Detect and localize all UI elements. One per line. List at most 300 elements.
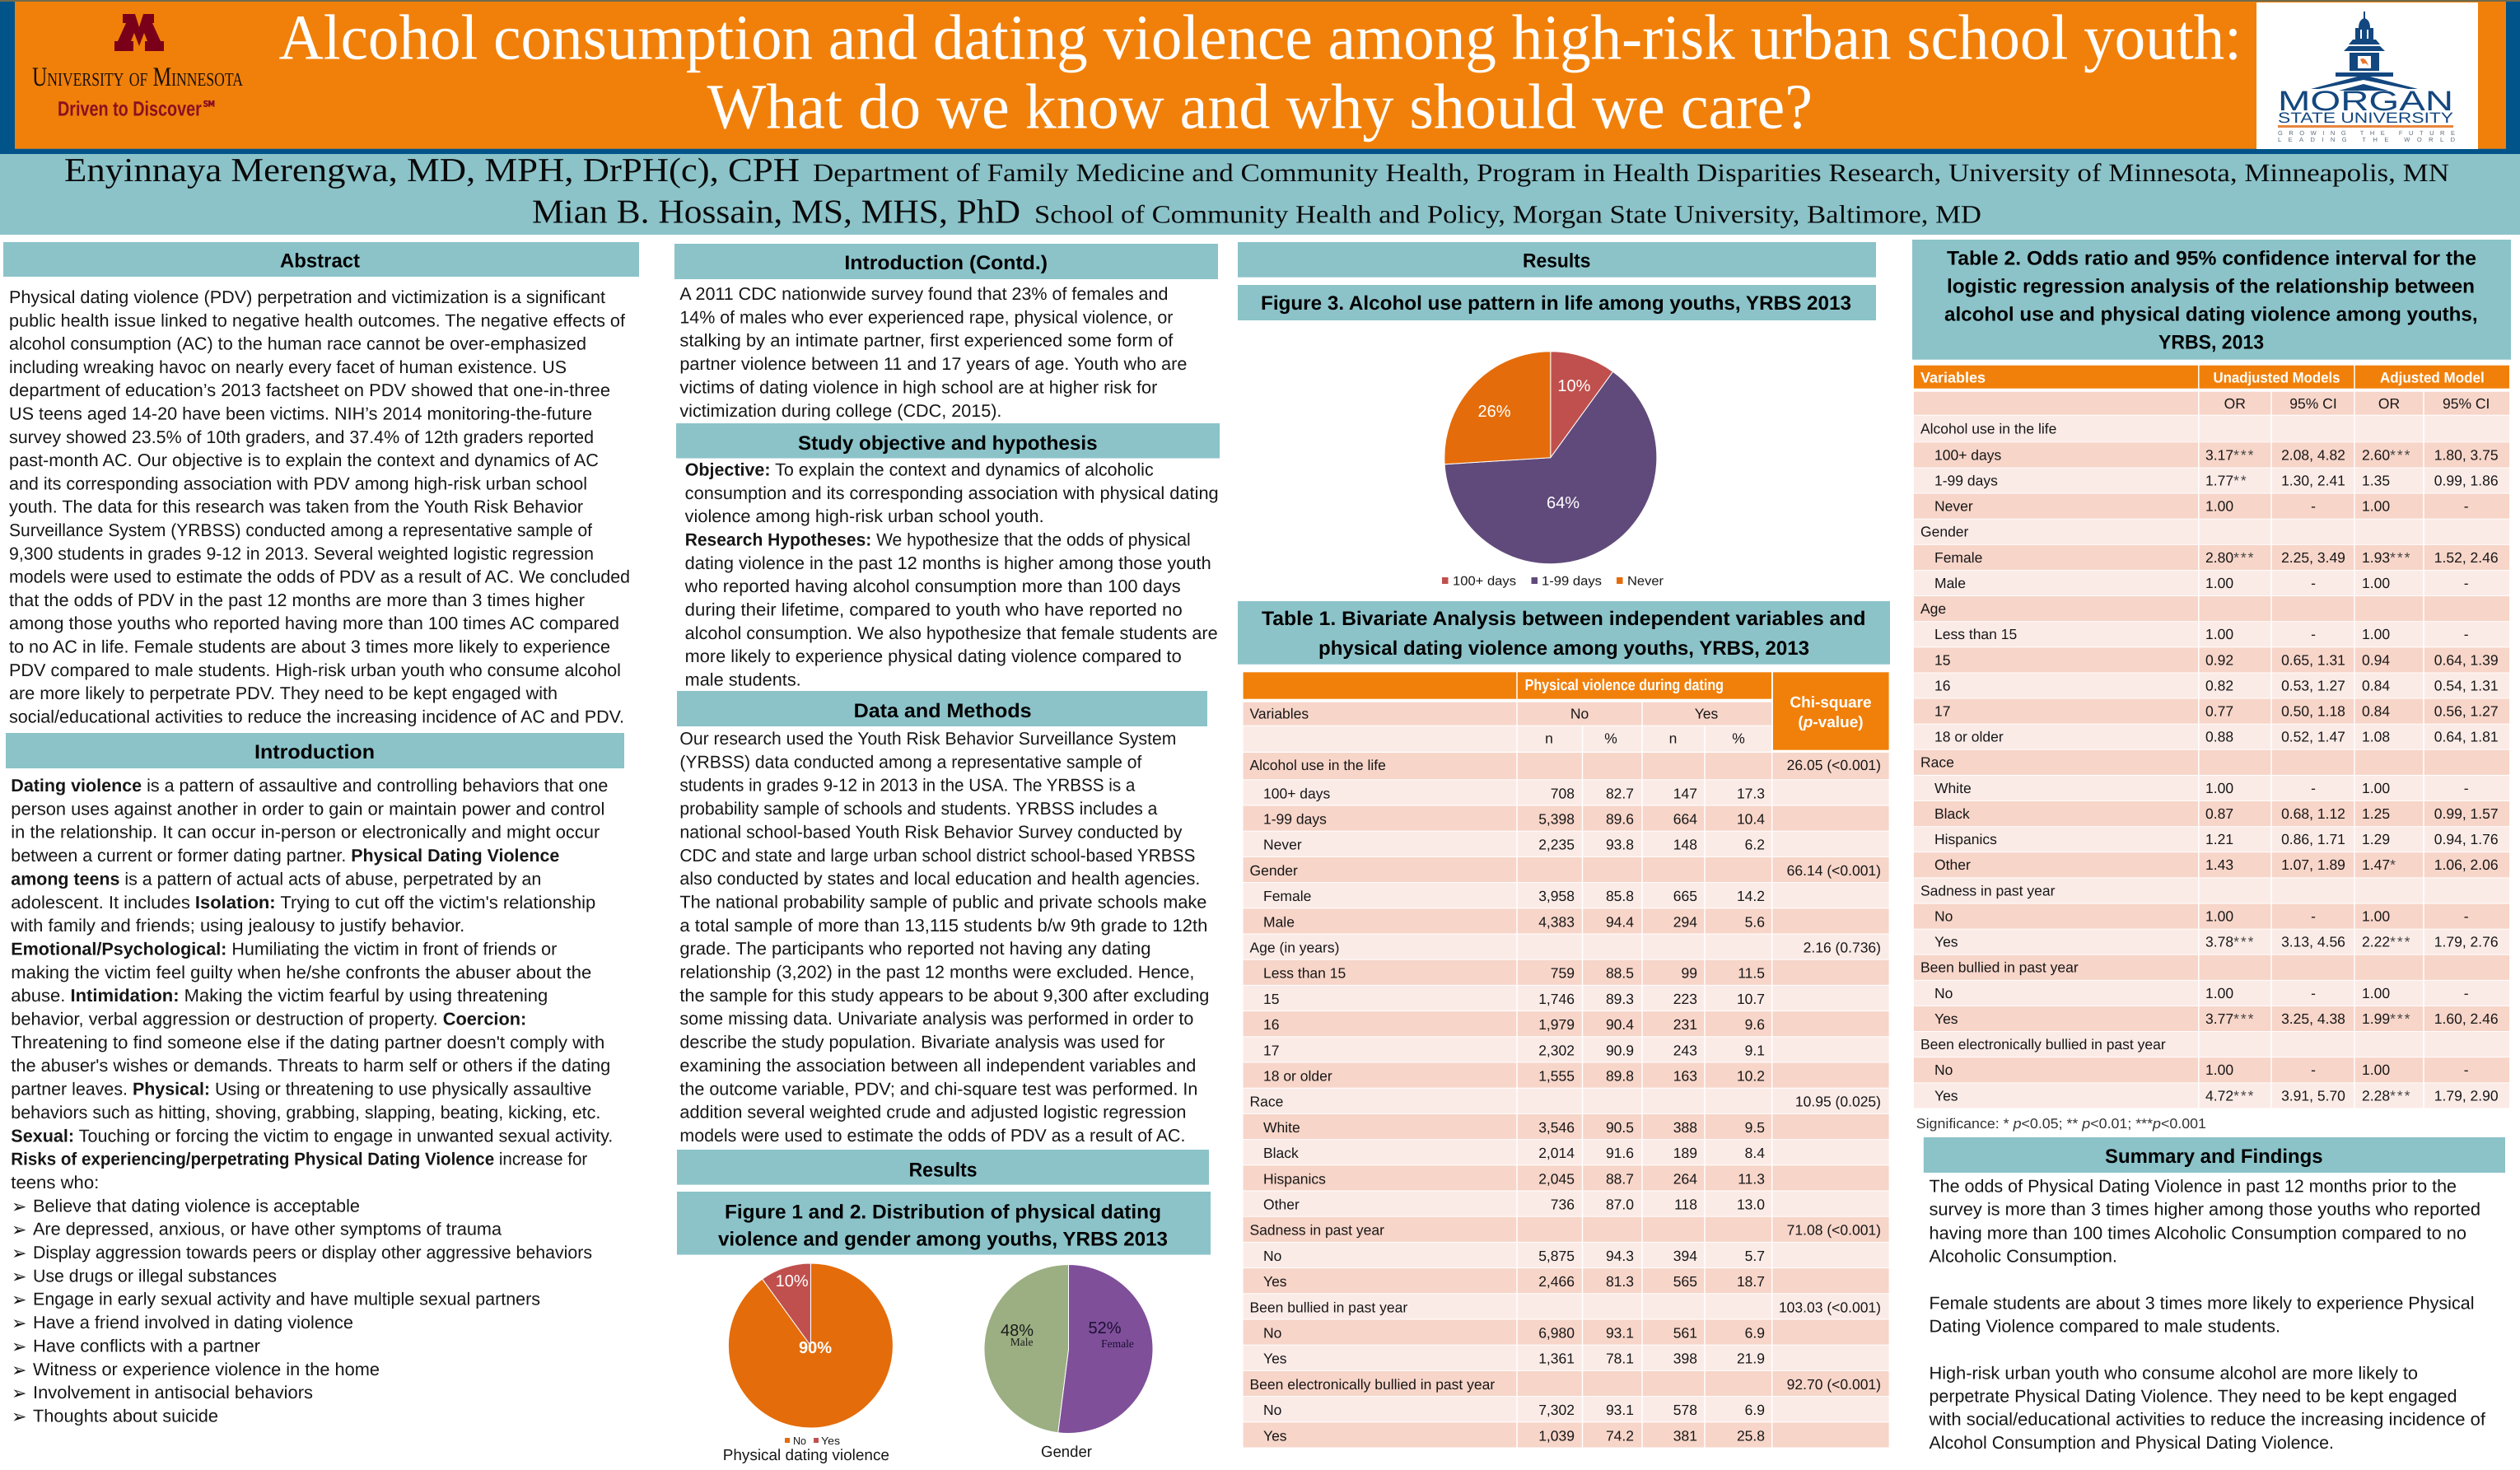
table rows: race: 10.95 (0.025) [1795, 1094, 1881, 1110]
table rows: alcohol use: 100+ days [1263, 785, 1330, 801]
table rows: race: 8.4 [1745, 1145, 1765, 1161]
table rows: alcohol use: 10.4 [1737, 810, 1765, 827]
pie chart: alcohol use pattern: 64% [1547, 494, 1580, 512]
legend: alcohol use: 1-99 days [1542, 575, 1602, 589]
band: authors and affiliations: Mian B. Hossain, MS, MHS, PhD [532, 193, 1020, 231]
text block: CDC survey [679, 284, 1187, 421]
table rows: age: 0.94 [2362, 651, 2390, 668]
table rows: age: Less than 15 [1263, 965, 1346, 982]
heading: table 1: physical dating violence among youths, YRBS, 2013 [1318, 637, 1809, 660]
text block: objective and hypotheses: dating violence in the past 12 months is higher among those youth [685, 553, 1211, 573]
table rows: race: Hispanics [1263, 1170, 1326, 1187]
table rows: alcohol use: 1.00 [2205, 497, 2233, 514]
table rows: sadness: 2,466 [1538, 1273, 1575, 1290]
table rows: race: 91.6 [1606, 1145, 1634, 1161]
table rows: age: 90.4 [1606, 1016, 1634, 1033]
panel: summary and findings [1924, 1137, 2505, 1453]
text block: summary finding on alcohol: having more than 100 times Alcoholic Consumption compared to no [1929, 1223, 2466, 1243]
table rows: sadness: 1.00 [2362, 908, 2390, 924]
table rows: sadness: No [1934, 908, 1953, 924]
list: risk factors [12, 1196, 592, 1428]
text block: objective and hypotheses: consumption and its corresponding association with physical dating [685, 483, 1219, 503]
text block: abstract body: US teens aged 14-20 have been victims. NIH’s 2014 monitoring-the-future [9, 404, 592, 423]
pie chart: alcohol use pattern: 26% [1477, 403, 1511, 421]
text block: summary recommendation: with social/educational activities to reduce the increasing incidence of [1928, 1410, 2485, 1430]
banner: title header [0, 0, 2520, 154]
caption: physical dating violence: Physical dating violence [723, 1447, 889, 1464]
heading: study objective [676, 423, 1220, 458]
pie chart: gender: 52% [1088, 1319, 1122, 1337]
table rows: sadness: 94.3 [1606, 1248, 1634, 1264]
text block: CDC survey: A 2011 CDC nationwide survey found that 23% of females and [679, 284, 1168, 304]
list: risk factors: Display aggression towards peers or display other aggressive behaviors [33, 1243, 592, 1262]
table rows: bullied: 21.9 [1737, 1351, 1765, 1367]
text block: summary finding on alcohol: survey is more than 3 times higher among those youths who reported [1929, 1200, 2480, 1220]
table rows: gender: 3,958 [1538, 888, 1575, 904]
logo: University of Minnesota [32, 14, 243, 120]
table rows: alcohol use: 0.99, 1.86 [2434, 472, 2499, 488]
table rows: bullied: 103.03 (<0.001) [1779, 1299, 1881, 1315]
list: risk factors: ➢ [12, 1314, 26, 1334]
table rows: bullied: 1.60, 2.46 [2434, 1010, 2499, 1027]
heading: results: Results [909, 1160, 978, 1182]
text block: methods: relationship (3,202) in the past 12 months were excluded. Hence, [679, 962, 1194, 982]
text block: abstract body: Surveillance System (YRBSS) conducted among a representative sample of [9, 520, 592, 540]
text block: introduction definitions: behavior, verbal aggression or destruction of property. Coercion: [11, 1010, 526, 1029]
table rows: electronically bullied: 6.9 [1745, 1402, 1765, 1418]
table rows: age: 163 [1673, 1067, 1697, 1084]
text block: abstract body: alcohol consumption (AC) to the human race cannot be over-emphasized [9, 334, 586, 354]
table rows: sadness: Yes [1263, 1273, 1287, 1290]
text block: abstract body: that the odds of PDV in the past 12 months are more than 3 times higher [9, 590, 585, 610]
pie chart: physical dating violence: 10% [776, 1272, 809, 1290]
text block: abstract body [9, 287, 630, 726]
table rows: gender: 1.93*** [2362, 549, 2411, 566]
table rows: sadness: 1.00 [2205, 908, 2233, 924]
table rows: age: 9.6 [1745, 1016, 1765, 1033]
heading: figure 3: Figure 3. Alcohol use pattern in life among youths, YRBS 2013 [1261, 292, 1851, 315]
table rows: electronically bullied: - [2464, 1062, 2469, 1078]
table rows: gender: 2.80*** [2205, 549, 2255, 566]
table rows: race: - [2311, 780, 2316, 796]
text block: CDC survey: 14% of males who ever experienced rape, physical violence, or [679, 307, 1173, 327]
table rows: electronically bullied: 1.79, 2.90 [2434, 1087, 2499, 1104]
table rows: alcohol use: Alcohol use in the life [1250, 757, 1386, 773]
text: tagline: Driven to Discover℠ [58, 97, 218, 120]
panel: introduction [6, 733, 624, 1428]
table rows: age: 90.9 [1606, 1042, 1634, 1058]
pie chart: gender: Female [1101, 1337, 1134, 1350]
text block: methods: the sample for this study appears to be about 9,300 after excluding [679, 986, 1209, 1006]
heading: table 2: alcohol use and physical dating violence among youths, [1944, 303, 2478, 325]
table rows: age: 1.00 [2205, 626, 2233, 642]
table rows: bullied [1914, 955, 2509, 1031]
table rows: age: 1.00 [2362, 626, 2390, 642]
text block: abstract body: models were used to estimate the odds of PDV as a result of AC. We concluded [9, 567, 630, 587]
text block: CDC survey: victims of dating violence in high school are at higher risk for [679, 377, 1157, 397]
table rows: age: 2,302 [1538, 1042, 1575, 1058]
table rows: bullied: 1.99*** [2362, 1010, 2411, 1027]
table rows: age: 18 or older [1934, 729, 2004, 745]
table rows: gender: Female [1934, 549, 1982, 566]
table rows: race: 9.5 [1745, 1119, 1765, 1136]
text block: introduction definitions: person uses against another in order to gain or maintain power and control [11, 799, 604, 819]
table rows: gender [1914, 520, 2509, 595]
table rows: age: 0.84 [2362, 703, 2390, 720]
table rows: race: 1.47* [2362, 856, 2397, 873]
text block: abstract body: public health issue linked to negative health outcomes. The negative effects of [9, 310, 625, 330]
table: logistic regression [1914, 365, 2509, 1108]
text: motto: GROWING THE FUTURE [2278, 129, 2455, 137]
table rows: gender [1244, 857, 1889, 934]
table rows: electronically bullied: 3.91, 5.70 [2281, 1087, 2345, 1104]
table rows: race: 87.0 [1606, 1196, 1634, 1212]
text block: introduction definitions: teens who: [11, 1173, 99, 1192]
table rows: alcohol use: 1.77** [2205, 472, 2248, 488]
heading: results [677, 1150, 1209, 1185]
heading: summary and findings [1924, 1137, 2505, 1173]
table rows: age: 99 [1682, 965, 1697, 982]
text block: summary finding on alcohol: The odds of Physical Dating Violence in past 12 months prior to the [1929, 1177, 2457, 1197]
table rows: race: 264 [1673, 1170, 1697, 1187]
table rows: race: White [1934, 780, 1972, 796]
table rows: alcohol use: 100+ days [1934, 446, 2001, 463]
text block: objective and hypotheses: alcohol consumption. We also hypothesize that female students are [685, 623, 1218, 643]
text block: introduction definitions: Risks of experiencing/perpetrating Physical Dating Violence increase for [11, 1150, 587, 1169]
text block: objective and hypotheses [684, 460, 1219, 690]
table rows: alcohol use: - [2464, 497, 2469, 514]
table rows: alcohol use: 5,398 [1538, 810, 1575, 827]
table rows: alcohol use [1244, 753, 1889, 856]
table rows: age: 17 [1934, 703, 1950, 720]
table rows: alcohol use: Never [1934, 497, 1973, 514]
table rows: race: 2,014 [1538, 1145, 1575, 1161]
panel: table 1 bivariate analysis [1238, 601, 1890, 1448]
table rows: bullied: 398 [1673, 1351, 1697, 1367]
text block: introduction definitions: behaviors such as hitting, shoving, grabbing, slapping, beating, kicking, etc. [11, 1103, 600, 1122]
heading: table 2: YRBS, 2013 [2158, 331, 2264, 353]
table header: OR [2378, 395, 2400, 412]
text block: abstract body: survey showed 23.5% of 10th graders, and 37.4% of 12th graders reported [9, 427, 594, 447]
table rows: sadness: 565 [1673, 1273, 1697, 1290]
panel: results figure 3 [1238, 242, 1876, 589]
table rows: age: - [2311, 626, 2316, 642]
heading: data and methods: Data and Methods [854, 700, 1032, 722]
table rows: gender: Gender [1920, 524, 1969, 540]
table rows: race: Hispanics [1934, 831, 1997, 847]
table header: n [1669, 730, 1677, 746]
table rows: electronically bullied: 578 [1673, 1402, 1697, 1418]
text block: introduction definitions: abuse. Intimidation: Making the victim fearful by using threatening [11, 986, 548, 1006]
heading: results: Results [1523, 250, 1591, 273]
text block: objective and hypotheses: during their lifetime, compared to youth who have reported no [685, 600, 1183, 619]
table header: Physical violence during dating [1525, 677, 1724, 694]
table rows: alcohol use: 26.05 (<0.001) [1787, 757, 1881, 773]
table rows: electronically bullied: No [1934, 1062, 1953, 1078]
table rows: sadness: 5.7 [1745, 1248, 1765, 1264]
table rows: race: 1.25 [2362, 805, 2390, 822]
text block: summary recommendation: High-risk urban youth who consume alcohol are more likely to [1929, 1363, 2418, 1383]
text block: methods: examining the association between all independent variables and [679, 1056, 1196, 1076]
table header: % [1732, 730, 1745, 746]
text block: summary finding on alcohol: Alcoholic Consumption. [1929, 1247, 2117, 1267]
table rows: bullied: No [1934, 985, 1953, 1001]
text block: abstract body: Physical dating violence (PDV) perpetration and victimization is a significant [9, 287, 605, 307]
legend: no / yes: Yes [821, 1435, 841, 1447]
table rows: age: - [2464, 626, 2469, 642]
table rows: alcohol use: 6.2 [1745, 837, 1765, 853]
table rows: race: 118 [1674, 1196, 1697, 1212]
table header: 95% CI [2289, 395, 2337, 412]
table rows: race: 736 [1551, 1196, 1575, 1212]
table rows: age: 89.3 [1606, 991, 1634, 1007]
table rows: alcohol use: 1.35 [2362, 472, 2390, 488]
text block: summary recommendation [1928, 1363, 2485, 1453]
table rows: sadness: 71.08 (<0.001) [1787, 1222, 1881, 1239]
table header: No [1570, 706, 1589, 722]
table rows: alcohol use: 89.6 [1606, 810, 1634, 827]
table rows: gender: 5.6 [1745, 913, 1765, 930]
text block: methods: describe the study population. Bivariate analysis was used for [679, 1033, 1164, 1052]
list: risk factors: ➢ [12, 1360, 26, 1381]
table rows: alcohol use: 708 [1551, 785, 1575, 801]
table rows: race: Other [1934, 856, 1971, 873]
table rows: age: 10.7 [1737, 991, 1765, 1007]
table rows: sadness: 81.3 [1606, 1273, 1634, 1290]
table rows: electronically bullied: 74.2 [1606, 1427, 1634, 1444]
table rows: age: 11.5 [1738, 965, 1765, 982]
table rows: gender: 665 [1673, 888, 1697, 904]
list: risk factors: Have conflicts with a partner [33, 1336, 260, 1356]
table rows: age: 16 [1263, 1016, 1279, 1033]
table rows: alcohol use: - [2311, 497, 2316, 514]
table rows: age: 0.88 [2205, 729, 2233, 745]
table rows: bullied: Been bullied in past year [1920, 959, 2079, 976]
text block: abstract body: to no AC in life. Female students are about 3 times more likely to experience [9, 637, 610, 657]
table rows: bullied: 561 [1673, 1324, 1697, 1341]
table rows: sadness [1244, 1217, 1889, 1293]
table rows: race: 11.3 [1738, 1170, 1765, 1187]
list: risk factors: Involvement in antisocial behaviors [33, 1383, 313, 1402]
pie chart: gender: 48% [1001, 1322, 1034, 1340]
table header [1244, 672, 1889, 752]
table rows: race [1244, 1089, 1889, 1216]
text block: abstract body: past-month AC. Our objective is to explain the context and dynamics of AC [9, 450, 599, 470]
band: authors and affiliations: Department of Family Medicine and Community Health, Program in Health Disparities Research, University of Minnesota, Minneapolis, MN [813, 158, 2449, 187]
text block: objective and hypotheses: violence among high-risk urban school youth. [685, 506, 1044, 526]
table rows: race: 1.07, 1.89 [2281, 856, 2345, 873]
table rows: electronically bullied: 1,039 [1538, 1427, 1575, 1444]
panel: abstract [3, 242, 639, 726]
table rows: electronically bullied: 1.00 [2205, 1062, 2233, 1078]
table rows: alcohol use: Alcohol use in the life [1920, 421, 2056, 437]
table rows: sadness: 3.13, 4.56 [2281, 934, 2345, 950]
table rows: race: Other [1263, 1196, 1300, 1212]
table rows: sadness: Sadness in past year [1920, 882, 2056, 898]
text block: introduction definitions: Sexual: Touching or forcing the victim to engage in unwanted sexual activity. [11, 1126, 613, 1146]
text block: methods: some missing data. Univariate analysis was performed in order to [679, 1009, 1193, 1029]
text block: introduction definitions: partner leaves. Physical: Using or threatening to use physically assaultive [11, 1080, 591, 1099]
table rows: age: 0.64, 1.81 [2434, 729, 2499, 745]
table header: % [1604, 730, 1617, 746]
table rows: gender: 85.8 [1606, 888, 1634, 904]
table rows: race: 0.86, 1.71 [2281, 831, 2345, 847]
heading: table 1: Table 1. Bivariate Analysis between independent variables and [1262, 608, 1866, 630]
table rows: race [1914, 750, 2509, 877]
table rows: age [1244, 934, 1889, 1088]
title [278, 1, 2242, 142]
heading: summary and findings: Summary and Findings [2105, 1146, 2322, 1168]
table rows: alcohol use: 664 [1673, 810, 1697, 827]
pie chart: gender [984, 1265, 1153, 1461]
table rows: age: 2.16 (0.736) [1804, 939, 1881, 955]
heading: results [1238, 242, 1876, 278]
table rows: electronically bullied: Been electronically bullied in past year [1920, 1036, 2166, 1052]
table rows: age: 15 [1263, 991, 1279, 1007]
table rows: gender: 4,383 [1538, 913, 1575, 930]
table rows: gender: - [2311, 575, 2316, 591]
table rows: race: - [2464, 780, 2469, 796]
table rows: race: 0.99, 1.57 [2434, 805, 2499, 822]
table rows: electronically bullied: Yes [1934, 1087, 1958, 1104]
heading: figure 3 [1238, 285, 1876, 320]
table rows: alcohol use: 93.8 [1606, 837, 1634, 853]
table rows: sadness: 5,875 [1538, 1248, 1575, 1264]
table header: Variables [1250, 706, 1309, 722]
logo: Morgan State University [2256, 2, 2478, 149]
table rows: race: 1.00 [2205, 780, 2233, 796]
table rows: age: Age [1920, 600, 1946, 617]
table rows: age: 9.1 [1745, 1042, 1765, 1058]
table rows: alcohol use: 147 [1673, 785, 1697, 801]
heading: introduction contd: Introduction (Contd.) [844, 252, 1048, 274]
list: risk factors: ➢ [12, 1384, 26, 1404]
caption: gender: Gender [1041, 1444, 1093, 1461]
text block: methods: The national probability sample of public and private schools make [679, 893, 1206, 912]
table rows: race: 90.5 [1606, 1119, 1634, 1136]
text block: introduction definitions: in the relationship. It can occur in-person or electronically and might occur [11, 823, 600, 842]
table rows: gender: 1.52, 2.46 [2434, 549, 2499, 566]
table rows: race: 1.21 [2205, 831, 2233, 847]
table header: Chi-square [1790, 694, 1872, 712]
text block: methods [679, 729, 1209, 1146]
text block: summary finding on alcohol [1929, 1177, 2480, 1267]
table rows: gender: 66.14 (<0.001) [1787, 862, 1881, 879]
list: risk factors: ➢ [12, 1407, 26, 1428]
text block: objective and hypotheses: more likely to experience physical dating violence compared to [685, 646, 1182, 666]
list: risk factors: ➢ [12, 1244, 26, 1264]
pie chart: alcohol use pattern: 10% [1557, 377, 1591, 395]
table header: (p-value) [1798, 714, 1864, 731]
text block: introduction definitions: making the victim feel guilty when he/she confronts the abuser about the [11, 963, 591, 982]
table rows: bullied: 1.00 [2205, 985, 2233, 1001]
table rows: age: 0.82 [2205, 677, 2233, 693]
table rows: race: 0.68, 1.12 [2281, 805, 2345, 822]
text block: introduction definitions: with family and friends; using jealousy to justify behavior. [10, 916, 464, 936]
table rows: gender: 94.4 [1606, 913, 1634, 930]
table rows: sadness: 18.7 [1737, 1273, 1765, 1290]
table rows: alcohol use: Never [1263, 837, 1302, 853]
table rows: race: 3,546 [1538, 1119, 1575, 1136]
table rows: bullied: - [2464, 985, 2469, 1001]
list: risk factors: Have a friend involved in dating violence [33, 1313, 353, 1332]
list: risk factors: Use drugs or illegal substances [33, 1266, 277, 1286]
text block: introduction definitions: the abuser's wishes or demands. Threats to harm self or others if the dating [11, 1056, 610, 1076]
table rows: bullied [1244, 1294, 1889, 1370]
table rows: electronically bullied: No [1263, 1402, 1281, 1418]
text block: methods: addition several weighted crude and adjusted logistic regression [679, 1103, 1186, 1122]
icon: maroon block M [114, 14, 164, 51]
table rows: sadness: 2.22*** [2362, 934, 2411, 950]
table rows: electronically bullied: - [2311, 1062, 2316, 1078]
table rows: bullied: 78.1 [1606, 1351, 1634, 1367]
table rows: age: 0.50, 1.18 [2281, 703, 2345, 720]
table rows: alcohol use: 1-99 days [1263, 810, 1327, 827]
table rows: electronically bullied: 25.8 [1737, 1427, 1765, 1444]
list: risk factors: ➢ [12, 1197, 26, 1217]
text block: CDC survey: victimization during college (CDC, 2015). [679, 401, 1001, 421]
table header: Variables [1920, 369, 1986, 385]
table rows: bullied: - [2311, 985, 2316, 1001]
band: authors and affiliations: Enyinnaya Merengwa, MD, MPH, DrPH(c), CPH [64, 151, 800, 189]
text block: methods: the outcome variable, PDV; and chi-square test was performed. In [679, 1079, 1197, 1099]
table rows: sadness: - [2464, 908, 2469, 924]
table rows: alcohol use: 82.7 [1606, 785, 1634, 801]
table rows: electronically bullied: 92.70 (<0.001) [1787, 1376, 1881, 1393]
table rows: age: Less than 15 [1934, 626, 2017, 642]
text: motto [2278, 129, 2456, 143]
table rows: age: 1,746 [1538, 991, 1575, 1007]
text block: methods: Our research used the Youth Risk Behavior Surveillance System [679, 729, 1176, 749]
table rows: age: 0.84 [2362, 677, 2390, 693]
panel: data and methods [677, 691, 1209, 1146]
table rows: electronically bullied: 381 [1673, 1427, 1697, 1444]
heading: table 2: Table 2. Odds ratio and 95% confidence interval for the [1947, 248, 2476, 270]
table rows: alcohol use: 2,235 [1538, 837, 1575, 853]
text block: summary recommendation: perpetrate Physical Dating Violence. They need to be kept engaged [1929, 1386, 2457, 1406]
text block: introduction definitions: Threatening to find someone else if the dating partner doesn't comply with [11, 1033, 604, 1052]
text block: summary finding on gender: Female students are about 3 times more likely to experience Physical [1929, 1293, 2474, 1313]
text block: methods: (YRBSS) data conducted among a representative sample of [679, 752, 1141, 772]
table rows: electronically bullied: 7,302 [1538, 1402, 1575, 1418]
heading: introduction [6, 733, 624, 768]
table rows: sadness: Sadness in past year [1250, 1222, 1384, 1239]
table rows: gender: Male [1263, 913, 1295, 930]
title: What do we know and why should we care? [707, 71, 1813, 142]
table rows: electronically bullied: Yes [1263, 1427, 1287, 1444]
text block: summary recommendation: Alcohol Consumption and Physical Dating Violence. [1929, 1433, 2334, 1453]
text block: methods: also conducted by states and local education and health agencies. [679, 869, 1200, 889]
table rows: age: 10.2 [1737, 1067, 1765, 1084]
list: risk factors: Witness or experience violence in the home [33, 1360, 380, 1379]
table rows: gender: Gender [1250, 862, 1298, 879]
table rows: sadness: 3.78*** [2205, 934, 2255, 950]
table rows: age: 17 [1263, 1042, 1279, 1058]
table rows: age: 231 [1673, 1016, 1697, 1033]
table rows: age: 0.64, 1.39 [2434, 651, 2499, 668]
text block: methods: students in grades 9-12 in 2013 in the USA. The YRBSS is a [679, 776, 1135, 796]
band: authors and affiliations [0, 151, 2520, 235]
icon: clock tower [2311, 12, 2418, 91]
text block: introduction definitions: Dating violence is a pattern of assaultive and controlling behaviors that one [11, 776, 608, 796]
table rows: alcohol use: 2.08, 4.82 [2281, 446, 2345, 463]
heading: introduction contd [674, 244, 1218, 279]
footnote: significance: Significance: * p<0.05; ** p<0.01; ***p<0.001 [1916, 1116, 2206, 1132]
table rows: race: Race [1250, 1094, 1283, 1110]
table header: n [1545, 730, 1553, 746]
text: university wordmark: University of Minnesota [32, 63, 243, 92]
text block: abstract body: social/educational activities to reduce the increasing incidence of AC and PDV. [9, 707, 624, 726]
